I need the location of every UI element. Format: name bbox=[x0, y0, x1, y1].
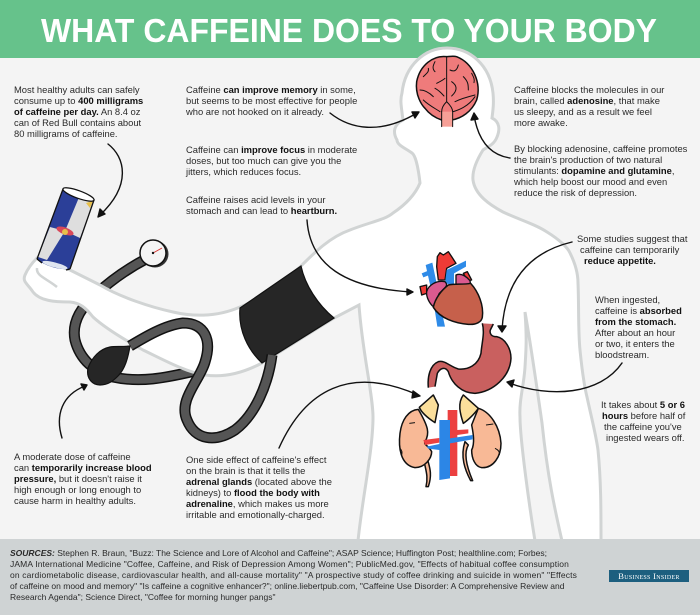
blood pressure cuff bbox=[240, 266, 334, 363]
text: absorption: When ingested, bbox=[595, 294, 660, 305]
logo: business insider bbox=[609, 570, 689, 582]
text: blood pressure bbox=[14, 451, 152, 506]
text: absorption bbox=[595, 294, 682, 360]
text: blood pressure: high enough or long enough to bbox=[14, 484, 141, 495]
text: focus: Caffeine can improve focus in moderate bbox=[186, 144, 357, 155]
text: appetite bbox=[577, 233, 688, 266]
text: blood pressure: cause harm in healthy adults. bbox=[14, 495, 136, 506]
arrow: appetite bbox=[502, 242, 572, 330]
text: adrenaline: adrenal glands (located above the bbox=[186, 476, 332, 487]
arrowhead: adrenal bbox=[412, 391, 420, 398]
icon: stomach bbox=[428, 323, 511, 393]
arrowhead: appetite bbox=[498, 326, 506, 332]
text: absorption: or two, it enters the bbox=[595, 338, 675, 349]
arrow: absorbed bbox=[509, 363, 622, 392]
logo: business insider: Business Insider bbox=[618, 571, 680, 581]
title: WHAT CAFFEINE DOES TO YOUR BODY bbox=[41, 12, 657, 49]
arrow: adrenal bbox=[279, 382, 418, 448]
sources: on cardiometabolic disease, cardiovascular health, and all-cause mortality" "A prospective study of coffee drinking and suicide in women" "Effects bbox=[10, 570, 577, 580]
text: memory: who are not hooked on it already. bbox=[186, 106, 324, 117]
text: half life bbox=[601, 399, 686, 443]
text: appetite: caffeine can temporarily bbox=[580, 244, 679, 255]
text: memory: but seems to be most effective for people bbox=[186, 95, 357, 106]
text: blood pressure: pressure, but it doesn't raise it bbox=[14, 473, 142, 484]
text: blood pressure: A moderate dose of caffeine bbox=[14, 451, 131, 462]
text: memory bbox=[186, 84, 357, 117]
text: memory: Caffeine can improve memory in some, bbox=[186, 84, 356, 95]
sources: JAMA International Medicine "Coffee, Caffeine, and Risk of Depression Among Women"; PublicMed.gov, "Effects of habitual coffee consumption bbox=[10, 559, 569, 569]
arrow: red bull bbox=[100, 144, 122, 215]
icon: heart bbox=[420, 252, 483, 327]
text: absorption: After about an hour bbox=[595, 327, 675, 338]
text: daily limit: Most healthy adults can safely bbox=[14, 84, 140, 95]
text: adenosine: more awake. bbox=[514, 117, 568, 128]
text: stimulants: the brain's production of two natural bbox=[514, 154, 662, 165]
text: adrenaline: on the brain is that it tells the bbox=[186, 465, 305, 476]
cuff tube bbox=[130, 323, 272, 438]
arrowhead: memory bbox=[412, 112, 419, 118]
text: daily limit: 80 milligrams of caffeine. bbox=[14, 128, 118, 139]
hand finger line bbox=[37, 268, 57, 287]
text: daily limit: consume up to 400 milligrams bbox=[14, 95, 143, 106]
icon: brain bbox=[416, 56, 478, 127]
sources: Research Agenda"; Science Direct, "Coffee for morning hunger pangs" bbox=[10, 592, 275, 602]
pump bulb bbox=[88, 346, 130, 385]
arrow: adenosine bbox=[474, 115, 510, 158]
text: half life: the caffeine you've bbox=[604, 421, 682, 432]
text: absorption: bloodstream. bbox=[595, 349, 649, 360]
text: adenosine: brain, called adenosine, that make bbox=[514, 95, 660, 106]
text: blood pressure: can temporarily increase blood bbox=[14, 462, 152, 473]
text: half life: It takes about 5 or 6 bbox=[601, 399, 685, 410]
text: daily limit: can of Red Bull contains about bbox=[14, 117, 141, 128]
text: appetite: reduce appetite. bbox=[584, 255, 656, 266]
text: adenosine: Caffeine blocks the molecules in our bbox=[514, 84, 664, 95]
text: absorption: from the stomach. bbox=[595, 316, 676, 327]
text: adrenaline: adrenaline, which makes us more bbox=[186, 498, 329, 509]
text: absorption: caffeine is absorbed bbox=[595, 305, 682, 316]
text: stimulants: stimulants: dopamine and glutamine, bbox=[514, 165, 674, 176]
text: daily limit bbox=[14, 84, 143, 139]
text: appetite: Some studies suggest that bbox=[577, 233, 687, 244]
text: half life: hours before half of bbox=[602, 410, 685, 421]
text: stimulants: By blocking adenosine, caffeine promotes bbox=[514, 143, 687, 154]
text: adrenaline: irritable and emotionally-charged. bbox=[186, 509, 325, 520]
arrow: memory bbox=[330, 113, 417, 127]
arrowhead: red bull bbox=[98, 209, 105, 217]
text: stimulants: which help boost our mood and even bbox=[514, 176, 667, 187]
text: adrenaline: kidneys) to flood the body with bbox=[186, 487, 320, 498]
text: half life: ingested wears off. bbox=[606, 432, 685, 443]
text: stimulants: reduce the risk of depression. bbox=[514, 187, 637, 198]
text: focus: doses, but too much can give you the bbox=[186, 155, 341, 166]
text: heartburn bbox=[186, 194, 337, 216]
text: heartburn: Caffeine raises acid levels in your bbox=[186, 194, 325, 205]
text: stimulants bbox=[514, 143, 687, 198]
body silhouette bbox=[24, 48, 601, 541]
arrows bbox=[59, 112, 622, 448]
icon: red bull can bbox=[37, 185, 95, 271]
text: adrenaline: One side effect of caffeine's effect bbox=[186, 454, 326, 465]
title band bbox=[0, 0, 700, 58]
text: focus bbox=[186, 144, 357, 177]
text: adenosine: us sleepy, and as a result we feel bbox=[514, 106, 652, 117]
arrowhead: absorbed bbox=[507, 380, 514, 387]
sources: of caffeine on mood and memory" "Is caffeine a cognitive enhancer?"; online.liebertpub.com, "Caffeine Use Disorder: A Comprehensive Review and bbox=[10, 581, 564, 591]
text: adenosine bbox=[514, 84, 664, 128]
text: heartburn: stomach and can lead to heartburn. bbox=[186, 205, 337, 216]
text: daily limit: of caffeine per day. An 8.4 oz bbox=[14, 106, 140, 117]
blood pressure gauge tube bbox=[74, 259, 195, 380]
text: focus: jitters, which reduces focus. bbox=[186, 166, 301, 177]
text: adrenaline bbox=[186, 454, 332, 520]
arrowhead: blood pressure bbox=[81, 384, 87, 390]
sources: SOURCES: Stephen R. Braun, "Buzz: The Science and Lore of Alcohol and Caffeine"; ASAP Science; Huffington Post; healthline.com; Forbes; bbox=[10, 548, 547, 558]
sources bbox=[10, 548, 577, 602]
arrowhead: adenosine bbox=[471, 113, 478, 120]
gauge bbox=[140, 240, 168, 268]
arrow: blood pressure bbox=[59, 386, 85, 438]
sources band bbox=[0, 539, 700, 615]
arrowhead: heartburn bbox=[407, 289, 413, 295]
icon: kidneys bbox=[399, 395, 501, 487]
arrow: heartburn bbox=[307, 220, 411, 292]
